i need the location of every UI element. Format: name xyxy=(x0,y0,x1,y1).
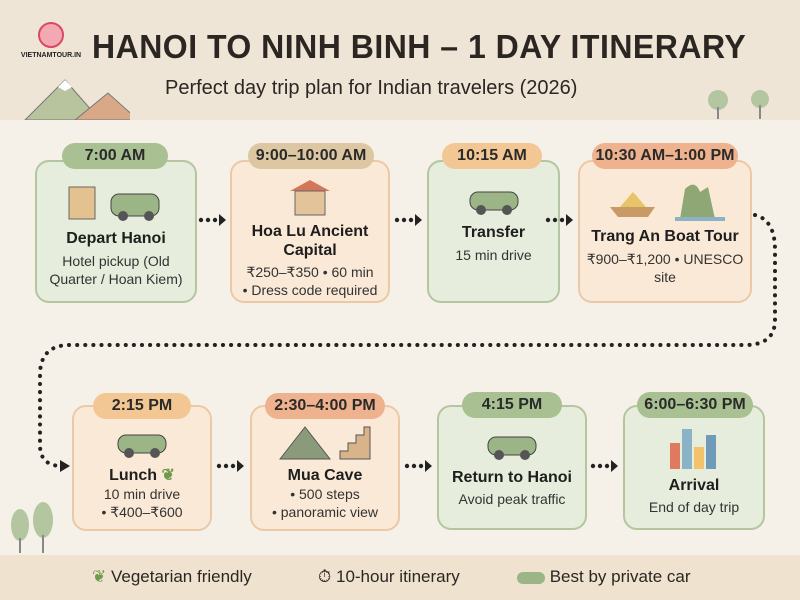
pill: 6:00-6:30 PM xyxy=(637,392,753,418)
logo: VIETNAMTOUR.IN xyxy=(21,52,81,59)
arrow xyxy=(216,460,244,472)
pill: 10:15 AM xyxy=(442,143,542,169)
pill: 10:30 AM-1:00 PM xyxy=(592,143,738,169)
arrow xyxy=(546,214,573,226)
card: hoa lu: Hoa Lu Ancient xyxy=(252,223,368,240)
card: lunch: Lunch ❦ xyxy=(109,467,175,484)
footer: 10-hour: ⏱ 10-hour itinerary xyxy=(318,567,460,586)
card: transfer: 15 min drive xyxy=(455,247,532,263)
arrow xyxy=(404,460,432,472)
card: arrival: Arrival xyxy=(669,477,719,494)
card: return: Return to Hanoi xyxy=(452,469,572,486)
title: HANOI TO NINH BINH – 1 DAY ITINERARY xyxy=(92,28,746,65)
footer xyxy=(0,555,800,600)
pill: 9:00-10:00 AM: 9:00–10:00 AM xyxy=(256,147,366,164)
card: trang an: Trang An Boat Tour xyxy=(591,228,739,245)
card: depart hanoi: Quarter / Hoan Kiem) xyxy=(49,271,183,287)
card: mua cave: Mua Cave xyxy=(288,467,362,484)
arrow xyxy=(394,214,422,226)
card: hoa lu: Capital xyxy=(283,242,337,259)
pill: 4:15 PM: 4:15 PM xyxy=(482,396,542,413)
pill: 10:15 AM: 10:15 AM xyxy=(457,147,527,164)
card: hoa lu: • Dress code required xyxy=(243,282,377,298)
pill: 7:00 AM xyxy=(62,143,168,169)
card: hoa lu: ₹250–₹350 • 60 min xyxy=(246,264,374,280)
card: lunch: • ₹400–₹600 xyxy=(101,504,183,520)
card: hoa lu xyxy=(230,160,390,303)
arrow xyxy=(590,460,618,472)
pill: 2:30-4:00 PM: 2:30–4:00 PM xyxy=(274,397,376,414)
logo xyxy=(21,22,81,59)
pill: 7:00 AM: 7:00 AM xyxy=(85,147,145,164)
header band xyxy=(0,0,800,120)
card: mua cave: • 500 steps xyxy=(290,486,360,502)
card: depart hanoi: Depart Hanoi xyxy=(66,230,166,247)
card: lunch: 10 min drive xyxy=(104,486,180,502)
card: mua cave: • panoramic view xyxy=(272,504,378,520)
footer: private car: Best by private car xyxy=(550,567,691,586)
icon: trees left xyxy=(11,502,53,553)
arrow xyxy=(198,214,226,226)
card: return: Avoid peak traffic xyxy=(459,491,565,507)
pill: 9:00-10:00 AM xyxy=(248,143,374,169)
icon: mountains xyxy=(24,79,130,120)
subtitle: Perfect day trip plan for Indian travelers (2026) xyxy=(165,77,577,99)
card: arrival xyxy=(623,405,765,530)
card: trang an: ₹900–₹1,200 • UNESCO xyxy=(587,251,743,267)
pill: 10:30 AM-1:00 PM: 10:30 AM–1:00 PM xyxy=(595,147,735,164)
card: transfer: Transfer xyxy=(462,224,525,241)
card: depart hanoi xyxy=(35,160,197,303)
pill: 6:00-6:30 PM: 6:00–6:30 PM xyxy=(644,396,746,413)
icon: trees xyxy=(708,90,769,119)
card: depart hanoi: Hotel pickup (Old xyxy=(62,253,170,269)
card: arrival: End of day trip xyxy=(649,499,739,515)
card: mua cave xyxy=(250,405,400,531)
card: transfer xyxy=(427,160,560,303)
pill: 2:15 PM xyxy=(93,393,191,419)
pill: 4:15 PM xyxy=(462,392,562,418)
card: trang an: site xyxy=(654,269,676,285)
pill: 2:30-4:00 PM xyxy=(265,393,385,419)
card: trang an xyxy=(578,160,752,303)
card: return xyxy=(437,405,587,530)
pill: 2:15 PM: 2:15 PM xyxy=(112,397,172,414)
footer: vegetarian: ❦ Vegetarian friendly xyxy=(92,567,252,586)
card: lunch xyxy=(72,405,212,531)
